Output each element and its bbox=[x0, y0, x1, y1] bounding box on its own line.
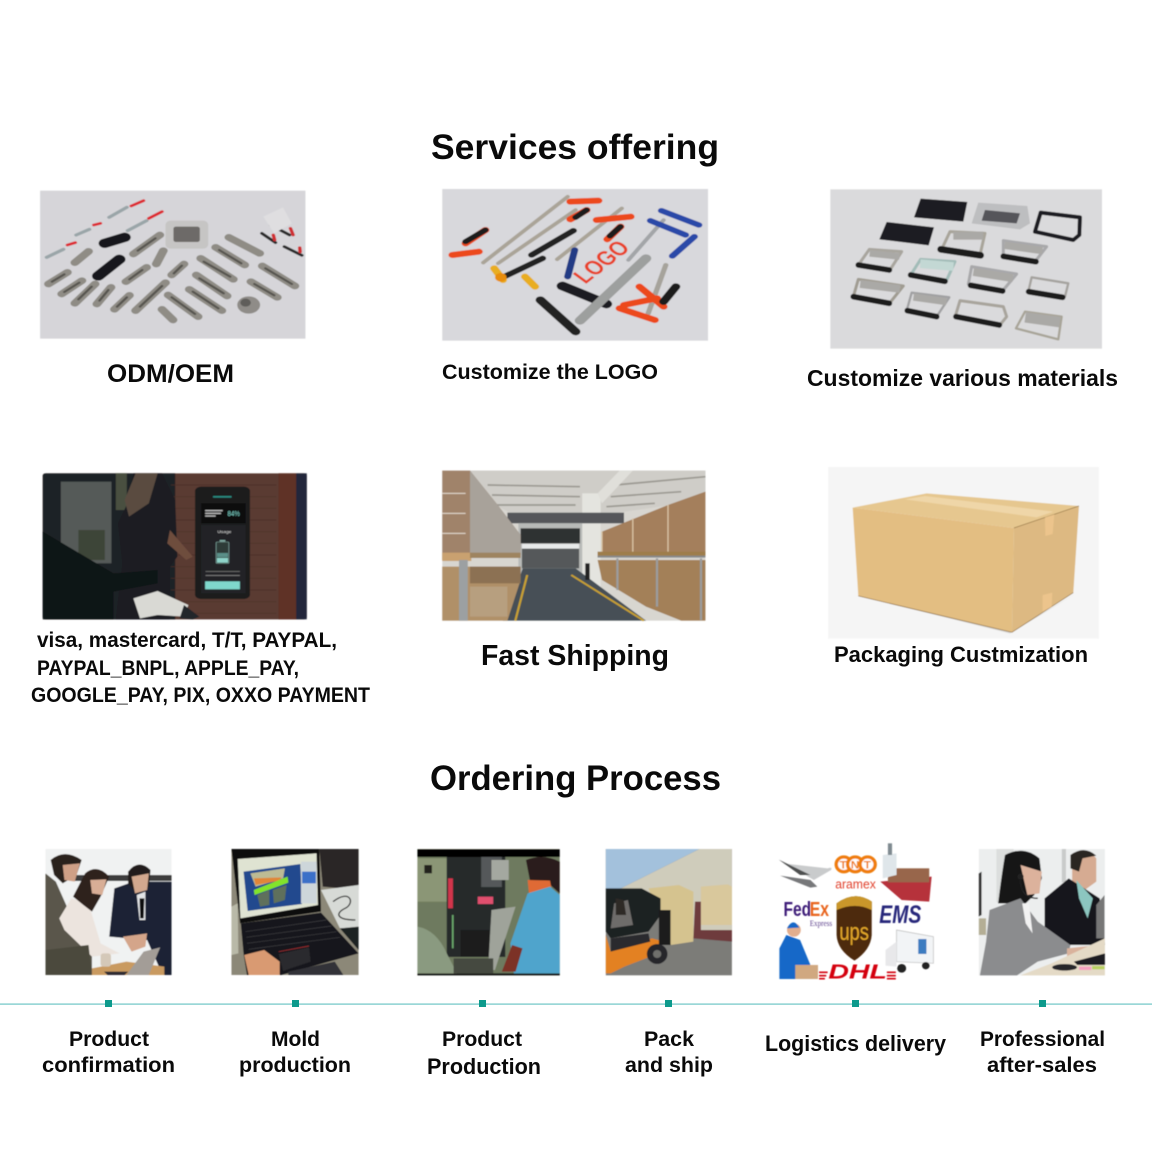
step label: Mold production: Mold bbox=[271, 1028, 320, 1051]
photo: warehouse bbox=[442, 471, 705, 621]
label: Packaging Custmization: Packaging Custmization bbox=[834, 642, 1088, 667]
step photo: Product Production bbox=[417, 849, 560, 975]
ship bbox=[880, 877, 932, 902]
step label: Mold production bbox=[239, 1028, 351, 1077]
delivery man bbox=[779, 935, 814, 979]
step label: Product confirmation bbox=[42, 1028, 175, 1077]
step photo: logistics carriers collage: N bbox=[851, 859, 859, 871]
step photo: Mold production bbox=[231, 849, 359, 975]
step photo: logistics carriers collage: T bbox=[864, 859, 871, 871]
label: Customize the LOGO: Customize the LOGO bbox=[442, 361, 658, 384]
aramex: aramex bbox=[835, 877, 876, 892]
label: payment methods bbox=[31, 629, 370, 707]
step label: Product confirmation: Product bbox=[69, 1028, 149, 1051]
label: payment methods: visa, mastercard, T/T, PAYPAL, bbox=[37, 629, 337, 652]
step photo: logistics carriers collage bbox=[779, 843, 933, 984]
title: Ordering Process: Ordering Process bbox=[430, 759, 721, 798]
label: ODM/OEM: ODM/OEM bbox=[107, 360, 234, 388]
step label: Pack and ship: and ship bbox=[625, 1054, 713, 1077]
photo: payment / charging terminal bbox=[43, 473, 307, 619]
plane bbox=[779, 860, 832, 888]
step label: Professional after-sales bbox=[980, 1028, 1105, 1077]
step label: Product Production: Production bbox=[427, 1054, 541, 1079]
photo: clamps with LOGO: LOGO bbox=[568, 236, 636, 288]
label: Fast Shipping: Fast Shipping bbox=[481, 640, 669, 672]
step label: Product Production bbox=[427, 1028, 541, 1079]
step label: Mold production: production bbox=[239, 1054, 351, 1077]
step label: Product confirmation: confirmation bbox=[42, 1054, 175, 1077]
step label: Professional after-sales: after-sales bbox=[987, 1054, 1097, 1077]
photo: payment / charging terminal: 84% bbox=[228, 509, 240, 518]
UPS shield bbox=[837, 896, 872, 961]
photo: ODM/OEM latches bbox=[40, 191, 305, 339]
FedEx: Fed bbox=[784, 899, 811, 921]
photo: clamps with LOGO bbox=[442, 189, 708, 341]
label: Customize various materials: Customize various materials bbox=[807, 365, 1118, 391]
step photo: Professional after-sales bbox=[979, 849, 1105, 975]
step photo: logistics carriers collage: ups bbox=[839, 919, 869, 946]
EMS: EMS bbox=[879, 901, 922, 929]
step label: Pack and ship: Pack bbox=[644, 1028, 694, 1051]
step label: Professional after-sales: Professional bbox=[980, 1028, 1105, 1051]
step photo: Product confirmation bbox=[45, 849, 172, 975]
timeline with step markers bbox=[0, 1000, 1152, 1007]
step label: Product Production: Product bbox=[442, 1028, 522, 1051]
step label: Logistics delivery: Logistics delivery bbox=[765, 1031, 947, 1056]
photo: payment / charging terminal: Usage bbox=[217, 530, 232, 534]
label: payment methods: GOOGLE_PAY, PIX, OXXO PAYMENT bbox=[31, 684, 370, 707]
step photo: logistics carriers collage: Ex bbox=[810, 899, 830, 921]
label: payment methods: PAYPAL_BNPL, APPLE_PAY, bbox=[37, 657, 299, 680]
step photo: logistics carriers collage: Express bbox=[810, 918, 832, 928]
step photo: logistics carriers collage: T bbox=[840, 859, 847, 871]
truck bbox=[897, 930, 933, 963]
TNT logo bbox=[836, 857, 875, 872]
photo: handles in various materials bbox=[830, 189, 1102, 349]
title: Services offering: Services offering bbox=[431, 128, 719, 167]
step photo: Pack and ship bbox=[606, 849, 732, 975]
photo: cardboard box bbox=[828, 467, 1099, 639]
DHL: DHL bbox=[828, 961, 887, 984]
step label: Pack and ship bbox=[625, 1028, 713, 1077]
